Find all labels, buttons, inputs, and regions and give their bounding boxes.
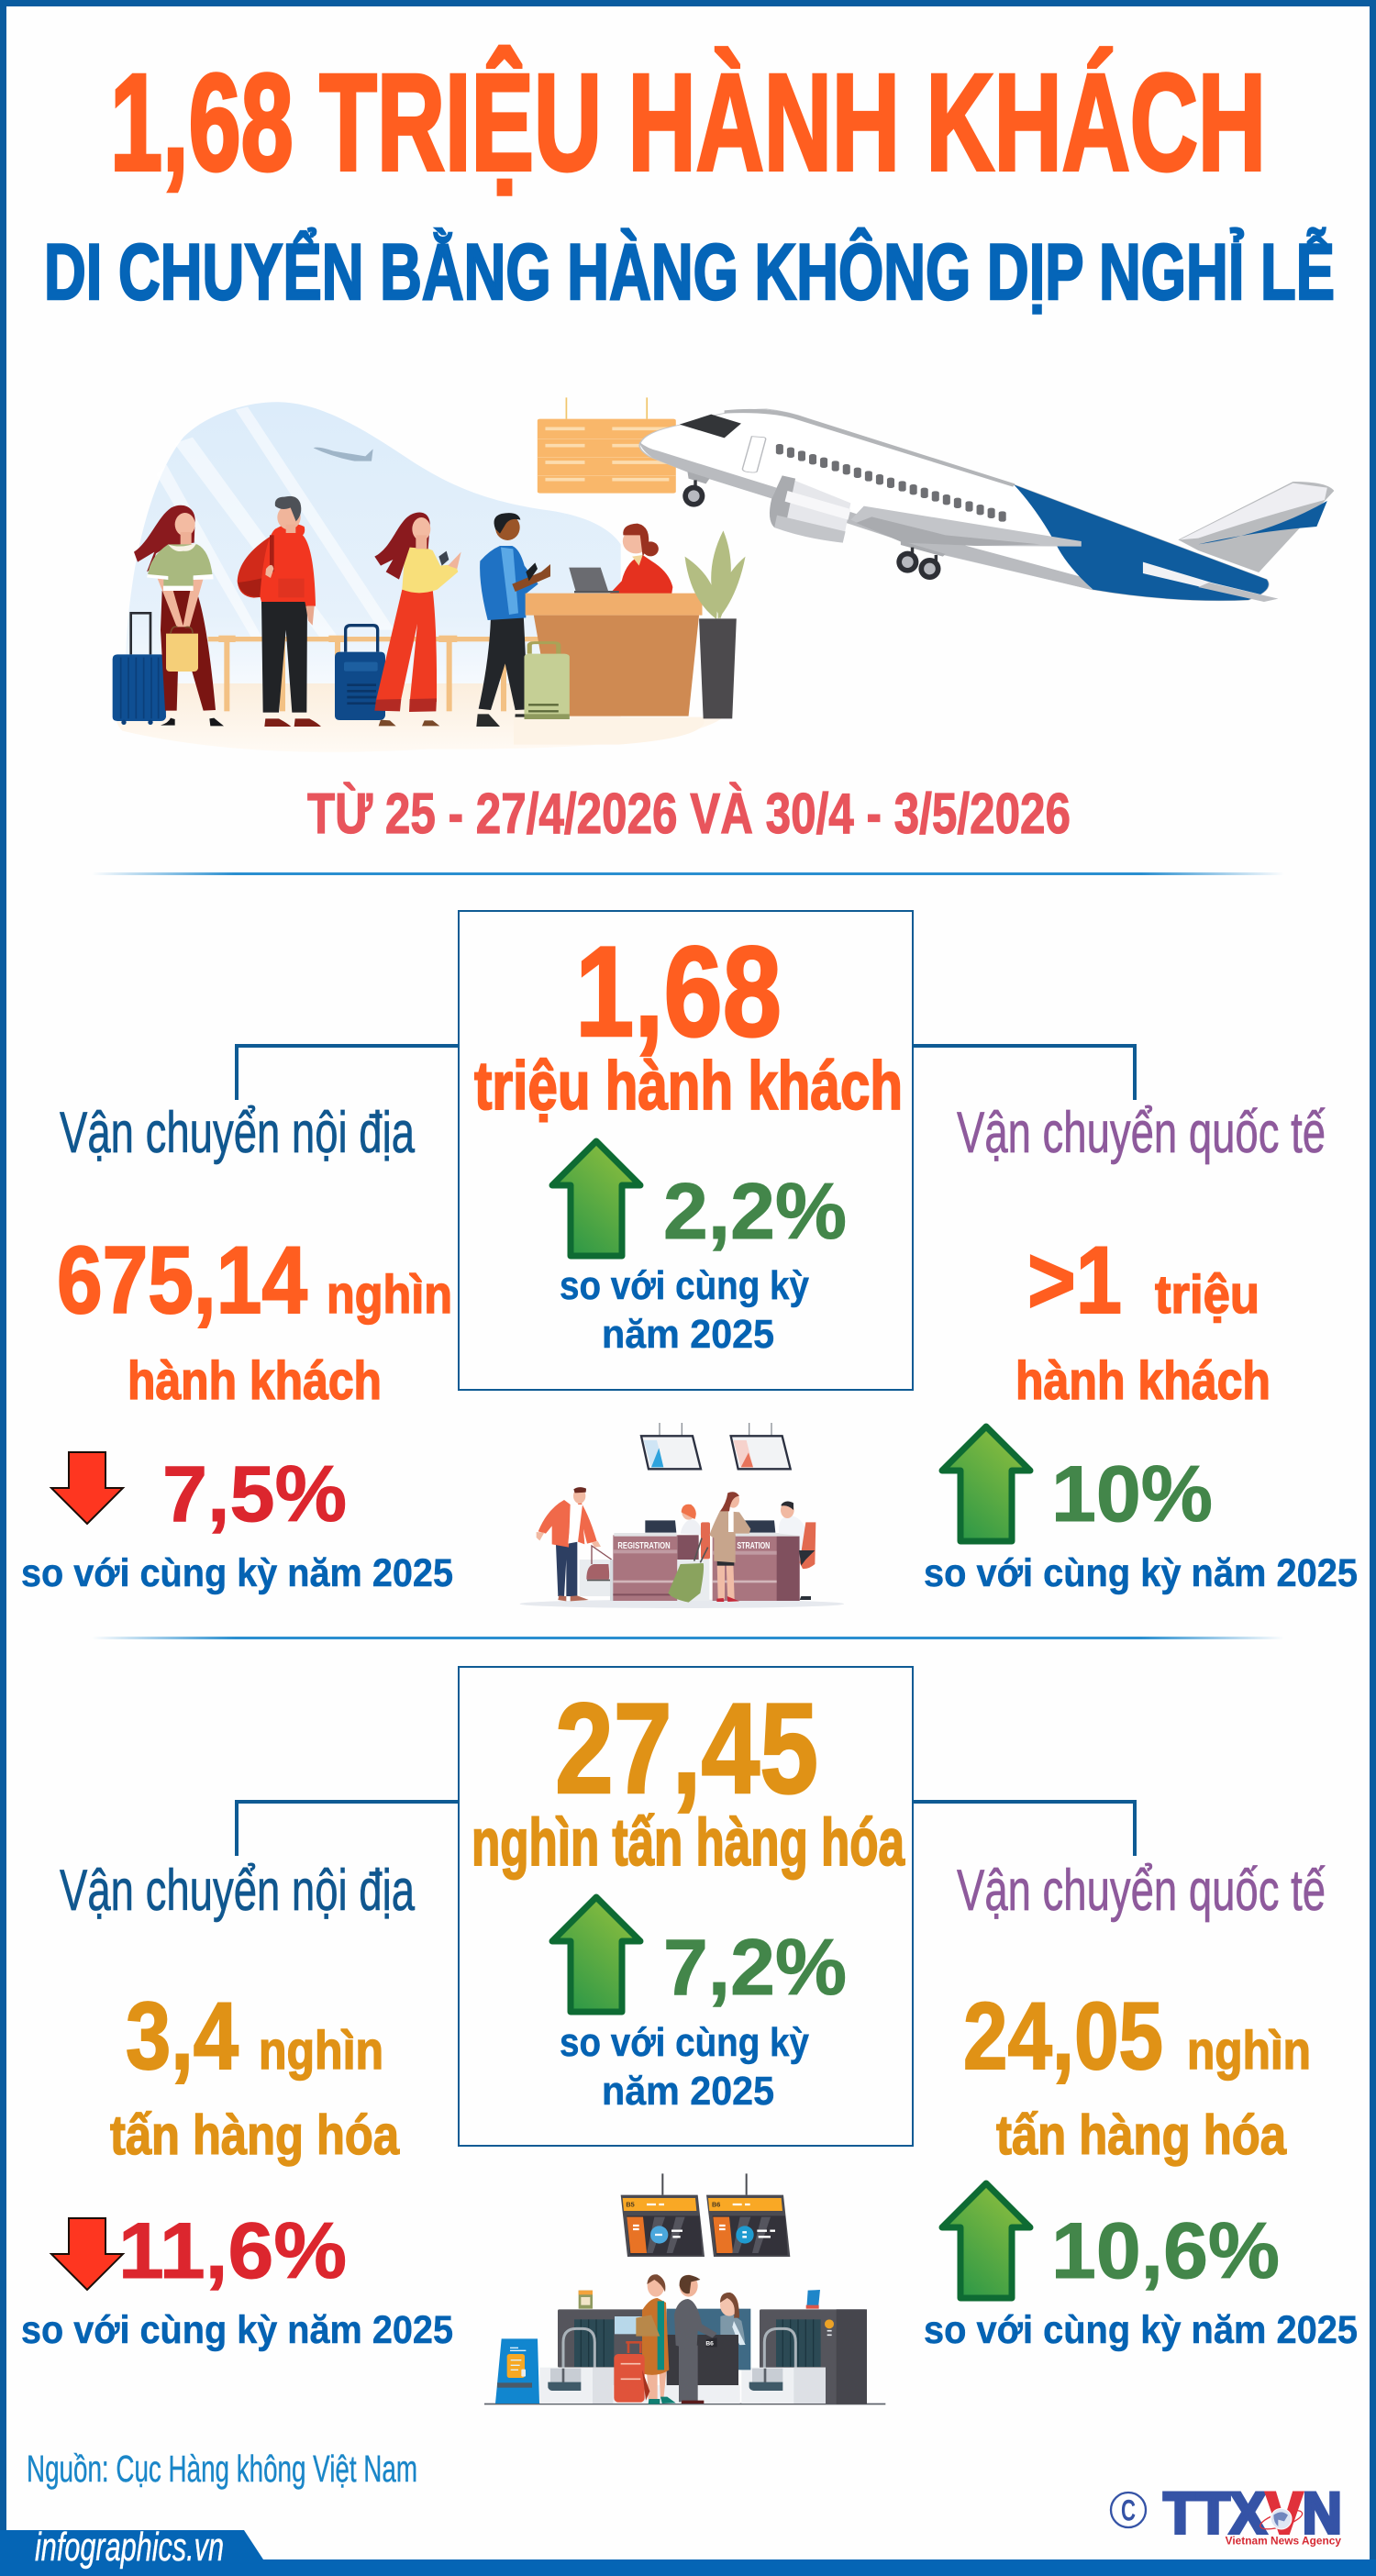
international change: 10% [1051, 1450, 1213, 1538]
total cargo unit: nghìn tấn hàng hóa [472, 1806, 905, 1880]
international unit line two: hành khách [1015, 1351, 1271, 1411]
total passengers value: 1,68 [575, 919, 782, 1063]
airplane [639, 409, 1334, 602]
gate screens: B6 [712, 2201, 720, 2209]
illustration: boarding gate [484, 2173, 885, 2404]
icon: down arrow [51, 1452, 123, 1524]
label: second registration sign: STRATION [737, 1541, 770, 1551]
small distant plane [314, 448, 373, 461]
domestic value: 3,4 [126, 1983, 239, 2090]
agent and counter [613, 2293, 750, 2404]
comparison year: năm 2025 [602, 1312, 774, 1357]
gate screens: B5 [626, 2201, 635, 2209]
domestic heading: Vận chuyển nội địa [60, 1101, 416, 1165]
check-in desk with receptionist [514, 524, 746, 745]
passenger 1 [113, 505, 224, 726]
floor shadow [520, 1600, 844, 1608]
international unit: triệu [1155, 1265, 1259, 1325]
passenger 4 [476, 513, 550, 727]
international value: 24,05 [963, 1983, 1163, 2090]
green suitcase [524, 643, 570, 719]
logo: TTXVN: Vietnam News Agency [1226, 2534, 1341, 2547]
domestic change: 11,6% [118, 2207, 347, 2295]
footer band [0, 2525, 1376, 2576]
icon: up arrow [552, 1141, 640, 1256]
date range: TỪ 25 - 27/4/2026 VÀ 30/4 - 3/5/2026 [307, 783, 1071, 846]
logo: TTXVN: C [1121, 2493, 1136, 2526]
icon: up arrow [942, 1427, 1030, 1541]
international value: >1 [1027, 1227, 1122, 1334]
icon: down arrow [51, 2218, 123, 2290]
domestic unit: nghìn [259, 2021, 383, 2081]
international change: 10,6% [1051, 2207, 1280, 2295]
agent and counter: B6 [705, 2341, 714, 2348]
domestic comparison: so với cùng kỳ năm 2025 [21, 2308, 453, 2352]
desks [580, 1502, 816, 1601]
domestic change: 7,5% [162, 1450, 347, 1538]
domestic value: 675,14 [57, 1227, 307, 1334]
illustration: registration desk [520, 1423, 844, 1608]
woman with green suitcase [668, 1492, 750, 1603]
domestic unit line two: tấn hàng hóa [110, 2104, 400, 2166]
blue kiosk [495, 2338, 539, 2404]
two passengers [614, 2274, 717, 2404]
connector lines [237, 1046, 1135, 1100]
window sky [126, 402, 621, 686]
domestic heading: Vận chuyển nội địa [60, 1859, 416, 1923]
floor [116, 683, 722, 752]
international unit: nghìn [1187, 2021, 1311, 2081]
comparison note: so với cùng kỳ [560, 2020, 809, 2065]
total growth: 2,2% [663, 1168, 847, 1256]
connector lines [237, 1802, 1135, 1856]
right scanner [741, 2290, 867, 2404]
icon: up arrow [942, 2183, 1030, 2298]
website: infographics.vn [35, 2525, 224, 2570]
railing [208, 636, 544, 711]
central box [459, 1667, 913, 2146]
domestic comparison: so với cùng kỳ năm 2025 [21, 1551, 453, 1595]
panel: cargo [21, 1667, 1358, 2352]
total growth: 7,2% [663, 1924, 847, 2012]
icon: up arrow [552, 1897, 640, 2012]
passenger 2 [238, 496, 321, 727]
comparison year: năm 2025 [602, 2069, 774, 2114]
logo: TTXVN: TTXVN [1163, 2482, 1342, 2546]
flight screens [641, 1423, 791, 1469]
domestic unit line two: hành khách [128, 1351, 382, 1411]
comparison note: so với cùng kỳ [560, 1263, 809, 1308]
source: Nguồn: Cục Hàng không Việt Nam [27, 2448, 417, 2490]
domestic unit: nghìn [327, 1265, 452, 1325]
flight board [538, 397, 676, 494]
central box [459, 911, 913, 1390]
total cargo value: 27,45 [555, 1676, 818, 1820]
man with orange jacket [537, 1487, 601, 1601]
total passengers unit: triệu hành khách [474, 1048, 903, 1124]
illustration: airport check-in queue [113, 397, 1334, 752]
label: registration sign: REGISTRATION [617, 1541, 671, 1551]
gate screens [621, 2173, 790, 2257]
passenger 3 [335, 513, 461, 726]
panel: passengers [21, 911, 1358, 1595]
left scanner [539, 2291, 647, 2404]
international unit line two: tấn hàng hóa [996, 2104, 1287, 2166]
